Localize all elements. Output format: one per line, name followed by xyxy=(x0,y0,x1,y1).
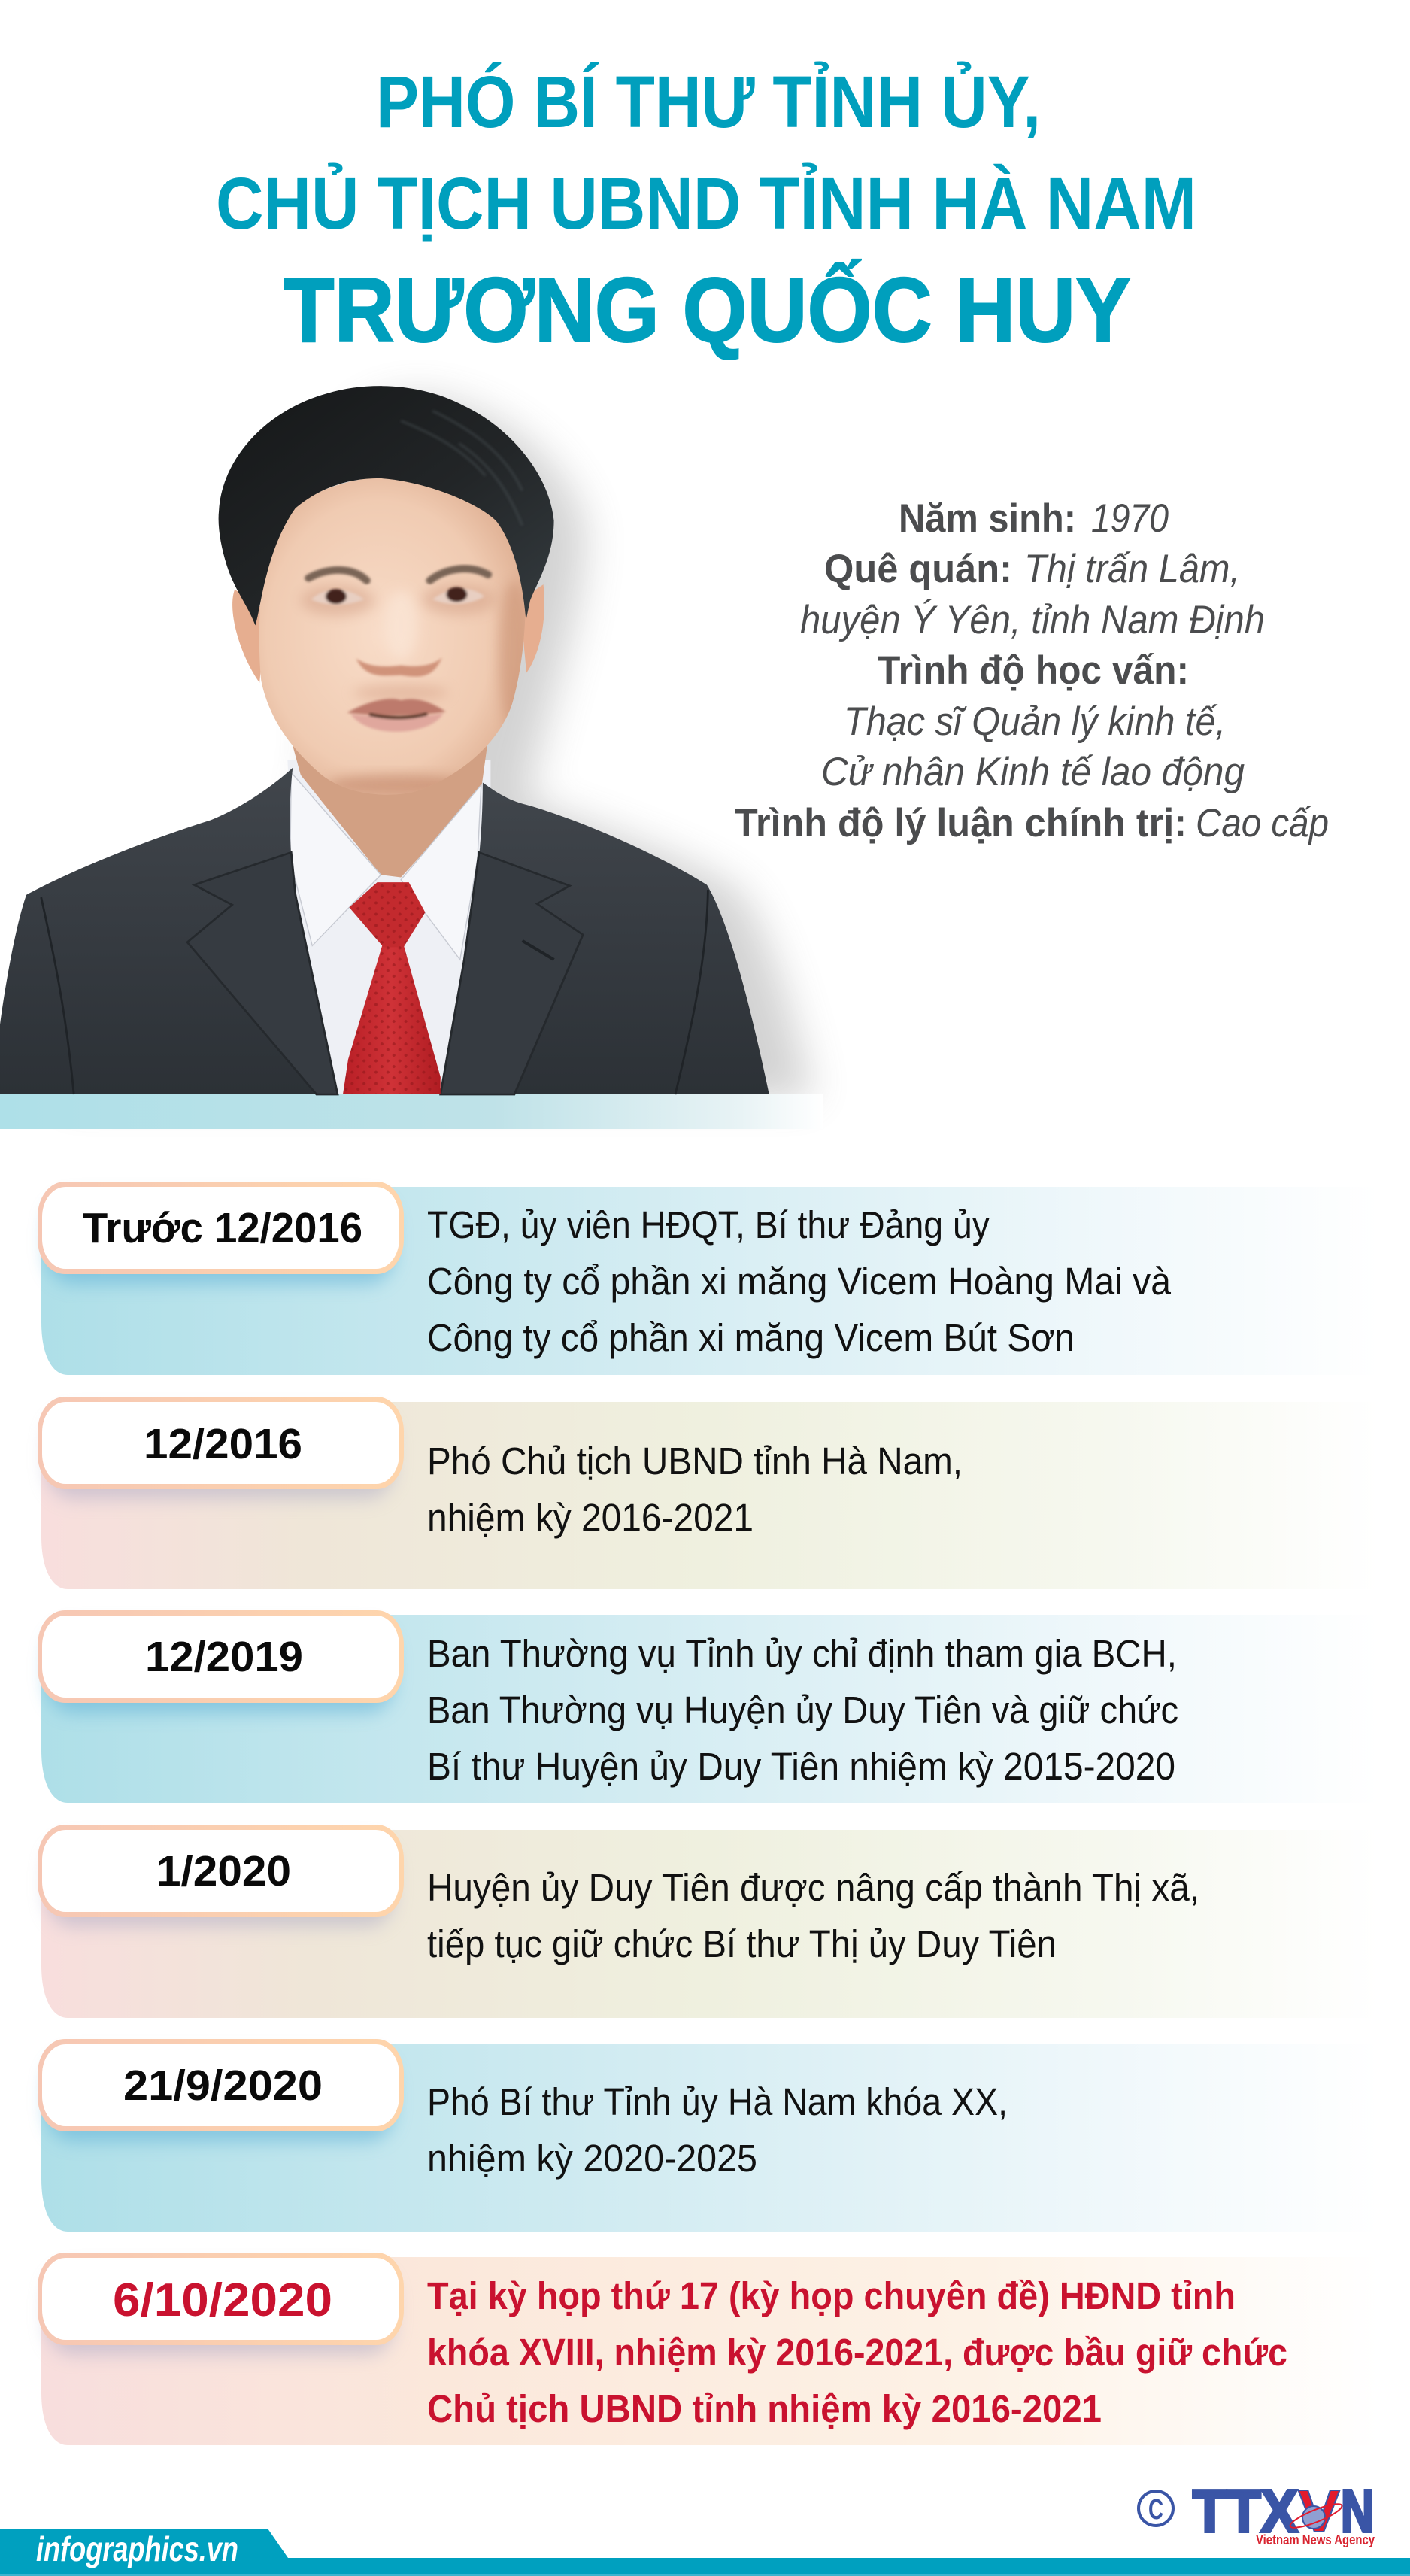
collar xyxy=(290,772,481,960)
description: nhiệm kỳ 2020-2025 xyxy=(427,2137,757,2180)
description: Phó Chủ tịch UBND tỉnh Hà Nam, xyxy=(427,1440,963,1482)
badge: 12/2016: 12/2016 xyxy=(144,1420,302,1468)
face xyxy=(259,476,526,795)
eyebrows xyxy=(308,569,488,581)
hair xyxy=(219,386,554,626)
biography text block: Trình độ học vấn: xyxy=(878,648,1189,693)
description: Chủ tịch UBND tỉnh nhiệm kỳ 2016-2021 xyxy=(427,2387,1102,2430)
panel: 12/2019 xyxy=(38,1610,1380,1803)
badge: trước 12/2016 xyxy=(38,1182,404,1284)
description xyxy=(427,2080,1008,2180)
description: Công ty cổ phần xi măng Vicem Bút Sơn xyxy=(427,1316,1075,1359)
biography text block: Cử nhân Kinh tế lao động xyxy=(821,750,1245,794)
nose xyxy=(356,657,442,677)
badge: 6/10/2020: 6/10/2020 xyxy=(113,2274,332,2326)
portrait shadow xyxy=(63,396,812,1100)
badge: 1/2020 xyxy=(38,1825,404,1927)
ears xyxy=(232,584,544,683)
description xyxy=(427,1632,1178,1788)
logo: TTXVN: N xyxy=(1341,2477,1374,2544)
mouth xyxy=(347,699,446,732)
badge: 1/2020: 1/2020 xyxy=(156,1847,291,1895)
description xyxy=(427,1866,1199,1965)
logo: TTXVN: TTX xyxy=(1193,2477,1298,2544)
biography text block: Trình độ lý luận chính trị: xyxy=(735,801,1187,845)
logo: TTXVN xyxy=(1193,2477,1375,2547)
face shading xyxy=(301,581,530,796)
footer source label: infographics.vn xyxy=(36,2529,238,2568)
logo: TTXVN: Vietnam News Agency xyxy=(1256,2532,1375,2547)
biography text block: 1970 xyxy=(1091,496,1169,541)
teal strip under portrait xyxy=(0,1094,823,1129)
title: CHỦ TỊCH UBND TỈNH HÀ NAM xyxy=(216,162,1196,244)
biography text block: huyện Ý Yên, tỉnh Nam Định xyxy=(800,598,1265,642)
description: Ban Thường vụ Huyện ủy Duy Tiên và giữ chức xyxy=(427,1689,1178,1731)
eyes xyxy=(311,587,484,605)
panel: 6/10/2020 xyxy=(38,2253,1380,2445)
footer band xyxy=(0,2529,1410,2576)
title xyxy=(216,61,1196,361)
badge: trước 12/2016: Trước 12/2016 xyxy=(83,1204,362,1252)
description: TGĐ, ủy viên HĐQT, Bí thư Đảng ủy xyxy=(427,1203,990,1246)
right suit xyxy=(441,782,769,1094)
title: PHÓ BÍ THƯ TỈNH ỦY, xyxy=(376,61,1041,143)
badge: 6/10/2020 xyxy=(38,2253,404,2355)
description xyxy=(427,1203,1172,1359)
badge: 21/9/2020: 21/9/2020 xyxy=(123,2062,323,2110)
biography text block: Quê quán: xyxy=(824,547,1012,591)
sleeve seams xyxy=(41,890,708,1094)
tie xyxy=(343,882,441,1094)
hair sheen xyxy=(401,411,522,526)
description xyxy=(427,1440,963,1539)
description: Huyện ủy Duy Tiên được nâng cấp thành Thị xã, xyxy=(427,1866,1199,1909)
biography text block: Năm sinh: xyxy=(899,496,1076,541)
left suit xyxy=(0,768,338,1094)
panel: trước 12/2016 xyxy=(38,1182,1380,1375)
biography text block: Cao cấp xyxy=(1196,801,1329,845)
description: Tại kỳ họp thứ 17 (kỳ họp chuyên đề) HĐND tỉnh xyxy=(427,2274,1236,2317)
description: tiếp tục giữ chức Bí thư Thị ủy Duy Tiên xyxy=(427,1922,1057,1965)
description xyxy=(427,2274,1287,2430)
logo: TTXVN: V xyxy=(1298,2477,1340,2544)
biography text block: Thị trấn Lâm, xyxy=(1024,547,1240,591)
description: Ban Thường vụ Tỉnh ủy chỉ định tham gia BCH, xyxy=(427,1632,1177,1675)
panel: 12/2016 xyxy=(38,1397,1380,1589)
description: Phó Bí thư Tỉnh ủy Hà Nam khóa XX, xyxy=(427,2080,1008,2123)
logo: copyright mark xyxy=(1139,2491,1173,2526)
badge: 12/2019 xyxy=(38,1610,404,1713)
title: TRƯƠNG QUỐC HUY xyxy=(284,259,1131,361)
logo: copyright mark: C xyxy=(1148,2494,1163,2526)
biography text block: Thạc sĩ Quản lý kinh tế, xyxy=(844,699,1226,744)
panel: 21/9/2020 xyxy=(38,2039,1380,2232)
badge: 12/2019: 12/2019 xyxy=(145,1633,303,1681)
biography text block xyxy=(735,496,1329,845)
description: khóa XVIII, nhiệm kỳ 2016-2021, được bầu giữ chức xyxy=(427,2331,1287,2374)
panel: 1/2020 xyxy=(38,1825,1380,2018)
lapels xyxy=(187,852,583,1094)
badge: 21/9/2020 xyxy=(38,2039,404,2141)
description: nhiệm kỳ 2016-2021 xyxy=(427,1496,754,1539)
neck xyxy=(291,740,488,878)
description: Công ty cổ phần xi măng Vicem Hoàng Mai và xyxy=(427,1260,1172,1303)
shirt xyxy=(287,760,490,1094)
badge: 12/2016 xyxy=(38,1397,404,1499)
portrait photo illustration xyxy=(0,386,769,1094)
description: Bí thư Huyện ủy Duy Tiên nhiệm kỳ 2015-2020 xyxy=(427,1745,1175,1788)
